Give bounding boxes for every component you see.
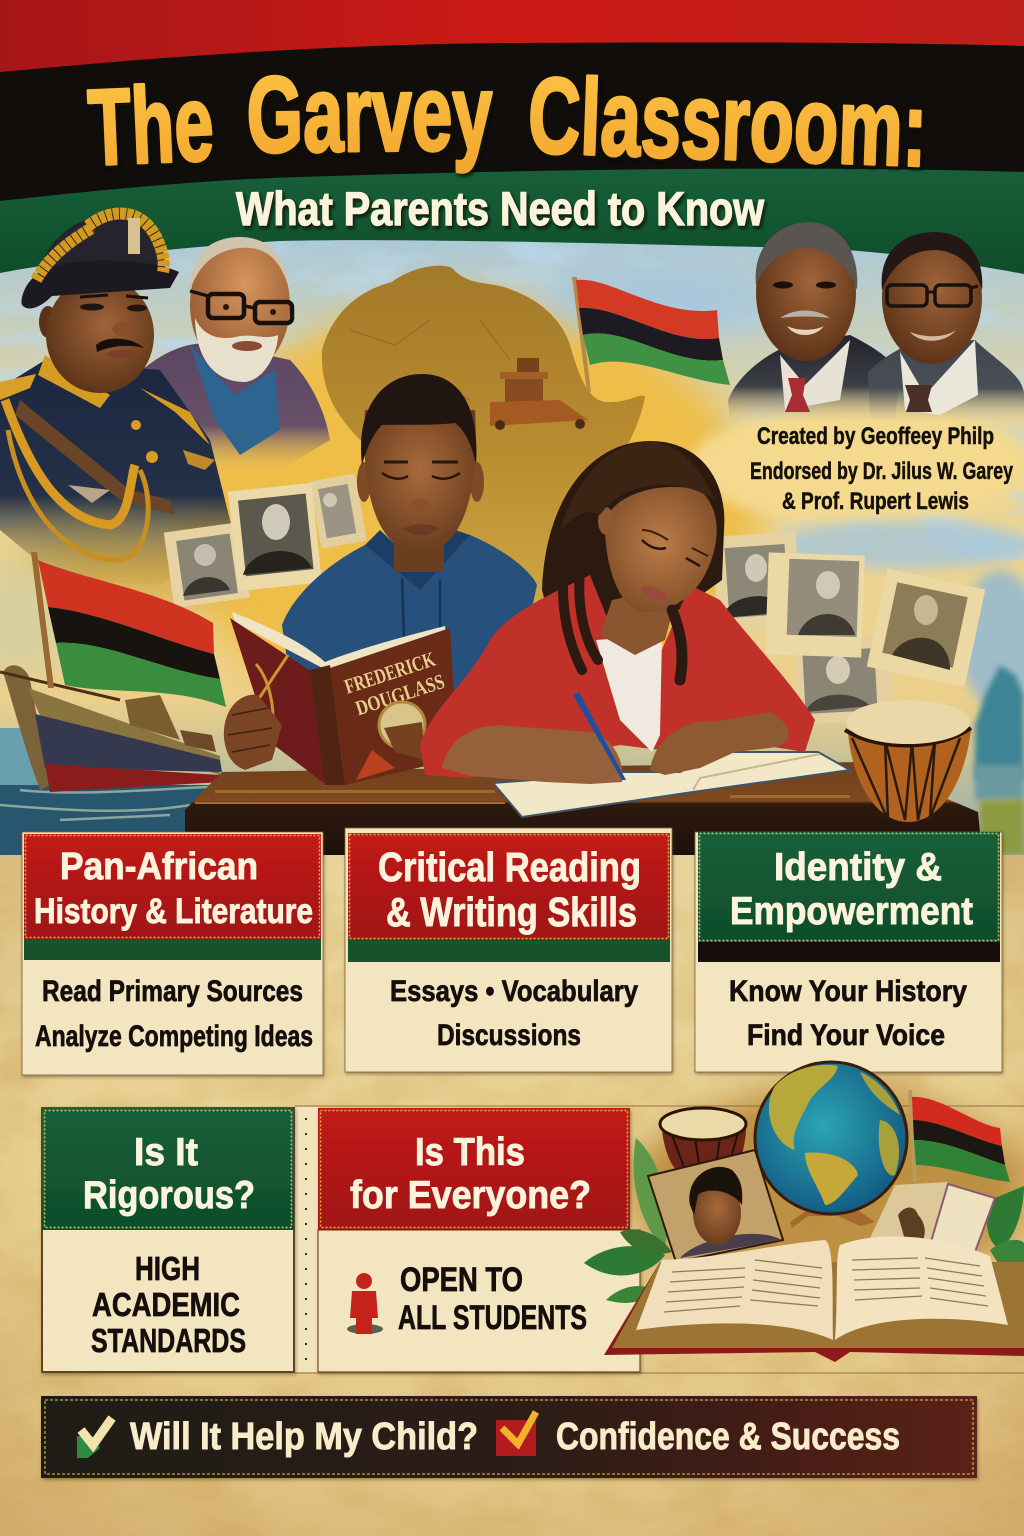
icon: small drum bbox=[660, 1108, 746, 1172]
table bbox=[185, 762, 980, 855]
panel: Critical Reading & Writing Skills: Critical Reading bbox=[378, 844, 641, 890]
map of Africa bbox=[322, 266, 645, 640]
portrait: man in gray suit with glasses bbox=[868, 232, 1024, 420]
steamship bbox=[0, 665, 222, 792]
panel: Pan-African History & Literature: History & Literature bbox=[34, 892, 313, 931]
panel: Is It Rigorous?: Is It bbox=[134, 1131, 198, 1174]
icon: red student figure bbox=[347, 1273, 383, 1334]
panel: Critical Reading & Writing Skills bbox=[345, 828, 672, 1072]
icon: green and cream check bbox=[77, 1418, 112, 1458]
small ship on the map bbox=[490, 358, 588, 430]
panel: Identity & Empowerment: Know Your History bbox=[729, 975, 967, 1008]
banner: Will It Help My Child?: Will It Help My Child? bbox=[130, 1416, 478, 1458]
illustration: girl writing bbox=[420, 441, 815, 784]
credits text: & Prof. Rupert Lewis bbox=[782, 488, 969, 515]
title: Garvey bbox=[246, 51, 493, 175]
panel: Critical Reading & Writing Skills: & Writing Skills bbox=[386, 889, 637, 935]
panel: dotted strip between cards bbox=[294, 1107, 318, 1372]
panel: Pan-African History & Literature: Pan-African bbox=[60, 846, 258, 888]
panel: Is This for Everyone?: Is This bbox=[415, 1131, 525, 1174]
panel: Is This for Everyone? bbox=[318, 1108, 640, 1372]
panel: Critical Reading & Writing Skills: Essays • Vocabulary bbox=[390, 975, 638, 1008]
credits text bbox=[750, 423, 1013, 515]
title bbox=[86, 51, 929, 189]
panel: Is It Rigorous?: Rigorous? bbox=[83, 1174, 255, 1217]
panel: Pan-African History & Literature: Analyze Competing Ideas bbox=[35, 1020, 313, 1053]
panel: Identity & Empowerment: Find Your Voice bbox=[747, 1019, 945, 1052]
panel: Is It Rigorous?: STANDARDS bbox=[91, 1322, 246, 1359]
banner: Will It Help My Child?: Confidence & Success bbox=[556, 1416, 900, 1458]
panel: Pan-African History & Literature bbox=[22, 832, 323, 1075]
archival photographs, left bbox=[164, 474, 367, 608]
panel: Is It Rigorous?: HIGH bbox=[135, 1250, 200, 1287]
panel: Is It Rigorous?: ACADEMIC bbox=[92, 1286, 240, 1323]
illustration: Frederick Douglass book: FREDERICK bbox=[341, 647, 439, 699]
subtitle: What Parents Need to Know bbox=[236, 182, 764, 235]
panel: Pan-African History & Literature: Read Primary Sources bbox=[42, 975, 303, 1008]
illustration: drum, globe, flag and open book collage bbox=[584, 1062, 1024, 1362]
icon: large open book bbox=[604, 1236, 1024, 1362]
archival photographs, right bbox=[712, 531, 985, 724]
sea bbox=[0, 728, 240, 855]
panel: Is This for Everyone?: OPEN TO bbox=[400, 1261, 523, 1299]
panel: Is It Rigorous? bbox=[42, 1108, 294, 1372]
illustration: Frederick Douglass book: DOUGLASS bbox=[353, 669, 447, 720]
Pan-African flag, top bbox=[572, 277, 730, 392]
portrait: Marcus Garvey in uniform bbox=[0, 213, 235, 585]
panel: Identity & Empowerment: Identity & bbox=[774, 846, 942, 889]
header ribbon bands bbox=[0, 0, 1024, 274]
lower parchment background bbox=[0, 855, 1024, 1536]
illustration: open notebook on the table bbox=[493, 752, 850, 817]
banner: Will It Help My Child? bbox=[41, 1396, 977, 1478]
icon: small Pan-African flag bbox=[908, 1090, 1010, 1182]
title: The bbox=[86, 62, 216, 188]
icon: globe bbox=[755, 1062, 907, 1228]
panel: Is This for Everyone?: ALL STUDENTS bbox=[398, 1299, 587, 1337]
illustration: boy reading bbox=[282, 374, 537, 760]
panel: Is This for Everyone?: for Everyone? bbox=[350, 1174, 591, 1217]
icon: small book with silhouette bbox=[870, 1182, 995, 1252]
portrait: man in dark suit with red tie bbox=[728, 222, 900, 420]
icon: red and gold check bbox=[496, 1412, 536, 1456]
icon: student portrait photo bbox=[648, 1150, 783, 1262]
panel: Critical Reading & Writing Skills: Discussions bbox=[437, 1019, 581, 1052]
illustration: djembe drum on table bbox=[845, 700, 971, 822]
portrait: elder with glasses and beard bbox=[140, 237, 330, 470]
panel: Identity & Empowerment: Empowerment bbox=[730, 890, 973, 933]
panel: Identity & Empowerment bbox=[695, 832, 1002, 1072]
illustration: Frederick Douglass book bbox=[224, 612, 456, 785]
Pan-African flag, left bbox=[31, 552, 226, 707]
icon: leaves bbox=[584, 1138, 1024, 1303]
panel: hero scene background bbox=[0, 230, 1024, 855]
